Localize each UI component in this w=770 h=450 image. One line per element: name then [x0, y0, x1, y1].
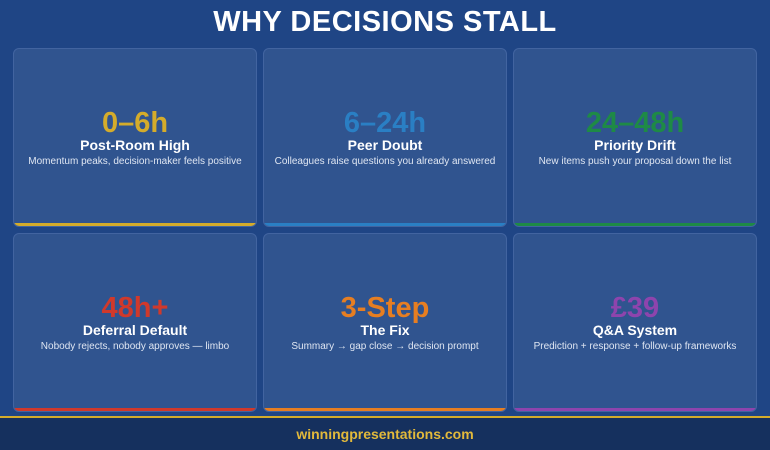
panel: £39: £39 — [611, 292, 659, 324]
panel: 6-24h: Peer Doubt — [348, 137, 422, 153]
panel: 24-48h — [513, 48, 757, 227]
panel: 48h+: 48h+ — [102, 292, 168, 324]
footer — [0, 416, 770, 450]
panel: £39 — [513, 233, 757, 412]
panel: 24-48h: New items push your proposal down the list — [539, 156, 731, 167]
panel: 0-6h: 0–6h — [102, 107, 168, 139]
panel: 48h+ — [13, 233, 257, 412]
panel: £39: Q&A System — [593, 322, 677, 338]
panel: 0-6h — [13, 48, 257, 227]
panel: 3-step: The Fix — [360, 322, 410, 338]
panel: £39: Prediction + response + follow-up frameworks — [534, 341, 736, 352]
panel: 3-step: 3-Step — [341, 292, 429, 324]
panel: 0-6h: Momentum peaks, decision-maker feels positive — [28, 156, 242, 167]
panel: 24-48h: Priority Drift — [594, 137, 676, 153]
panel: 0-6h: Post-Room High — [80, 137, 190, 153]
panel: 6-24h: Colleagues raise questions you already answered — [275, 156, 495, 167]
panel: 48h+: Deferral Default — [83, 322, 187, 338]
panel: 6-24h: 6–24h — [344, 107, 426, 139]
panel: 48h+: Nobody rejects, nobody approves — limbo — [41, 341, 229, 352]
panel: 3-step — [263, 233, 507, 412]
title: WHY DECISIONS STALL — [213, 6, 557, 38]
footer: winningpresentations.com — [296, 426, 474, 442]
panel: 24-48h: 24–48h — [586, 107, 684, 139]
panel: 6-24h — [263, 48, 507, 227]
panel: 3-step: Summary → gap close → decision prompt — [291, 341, 479, 352]
